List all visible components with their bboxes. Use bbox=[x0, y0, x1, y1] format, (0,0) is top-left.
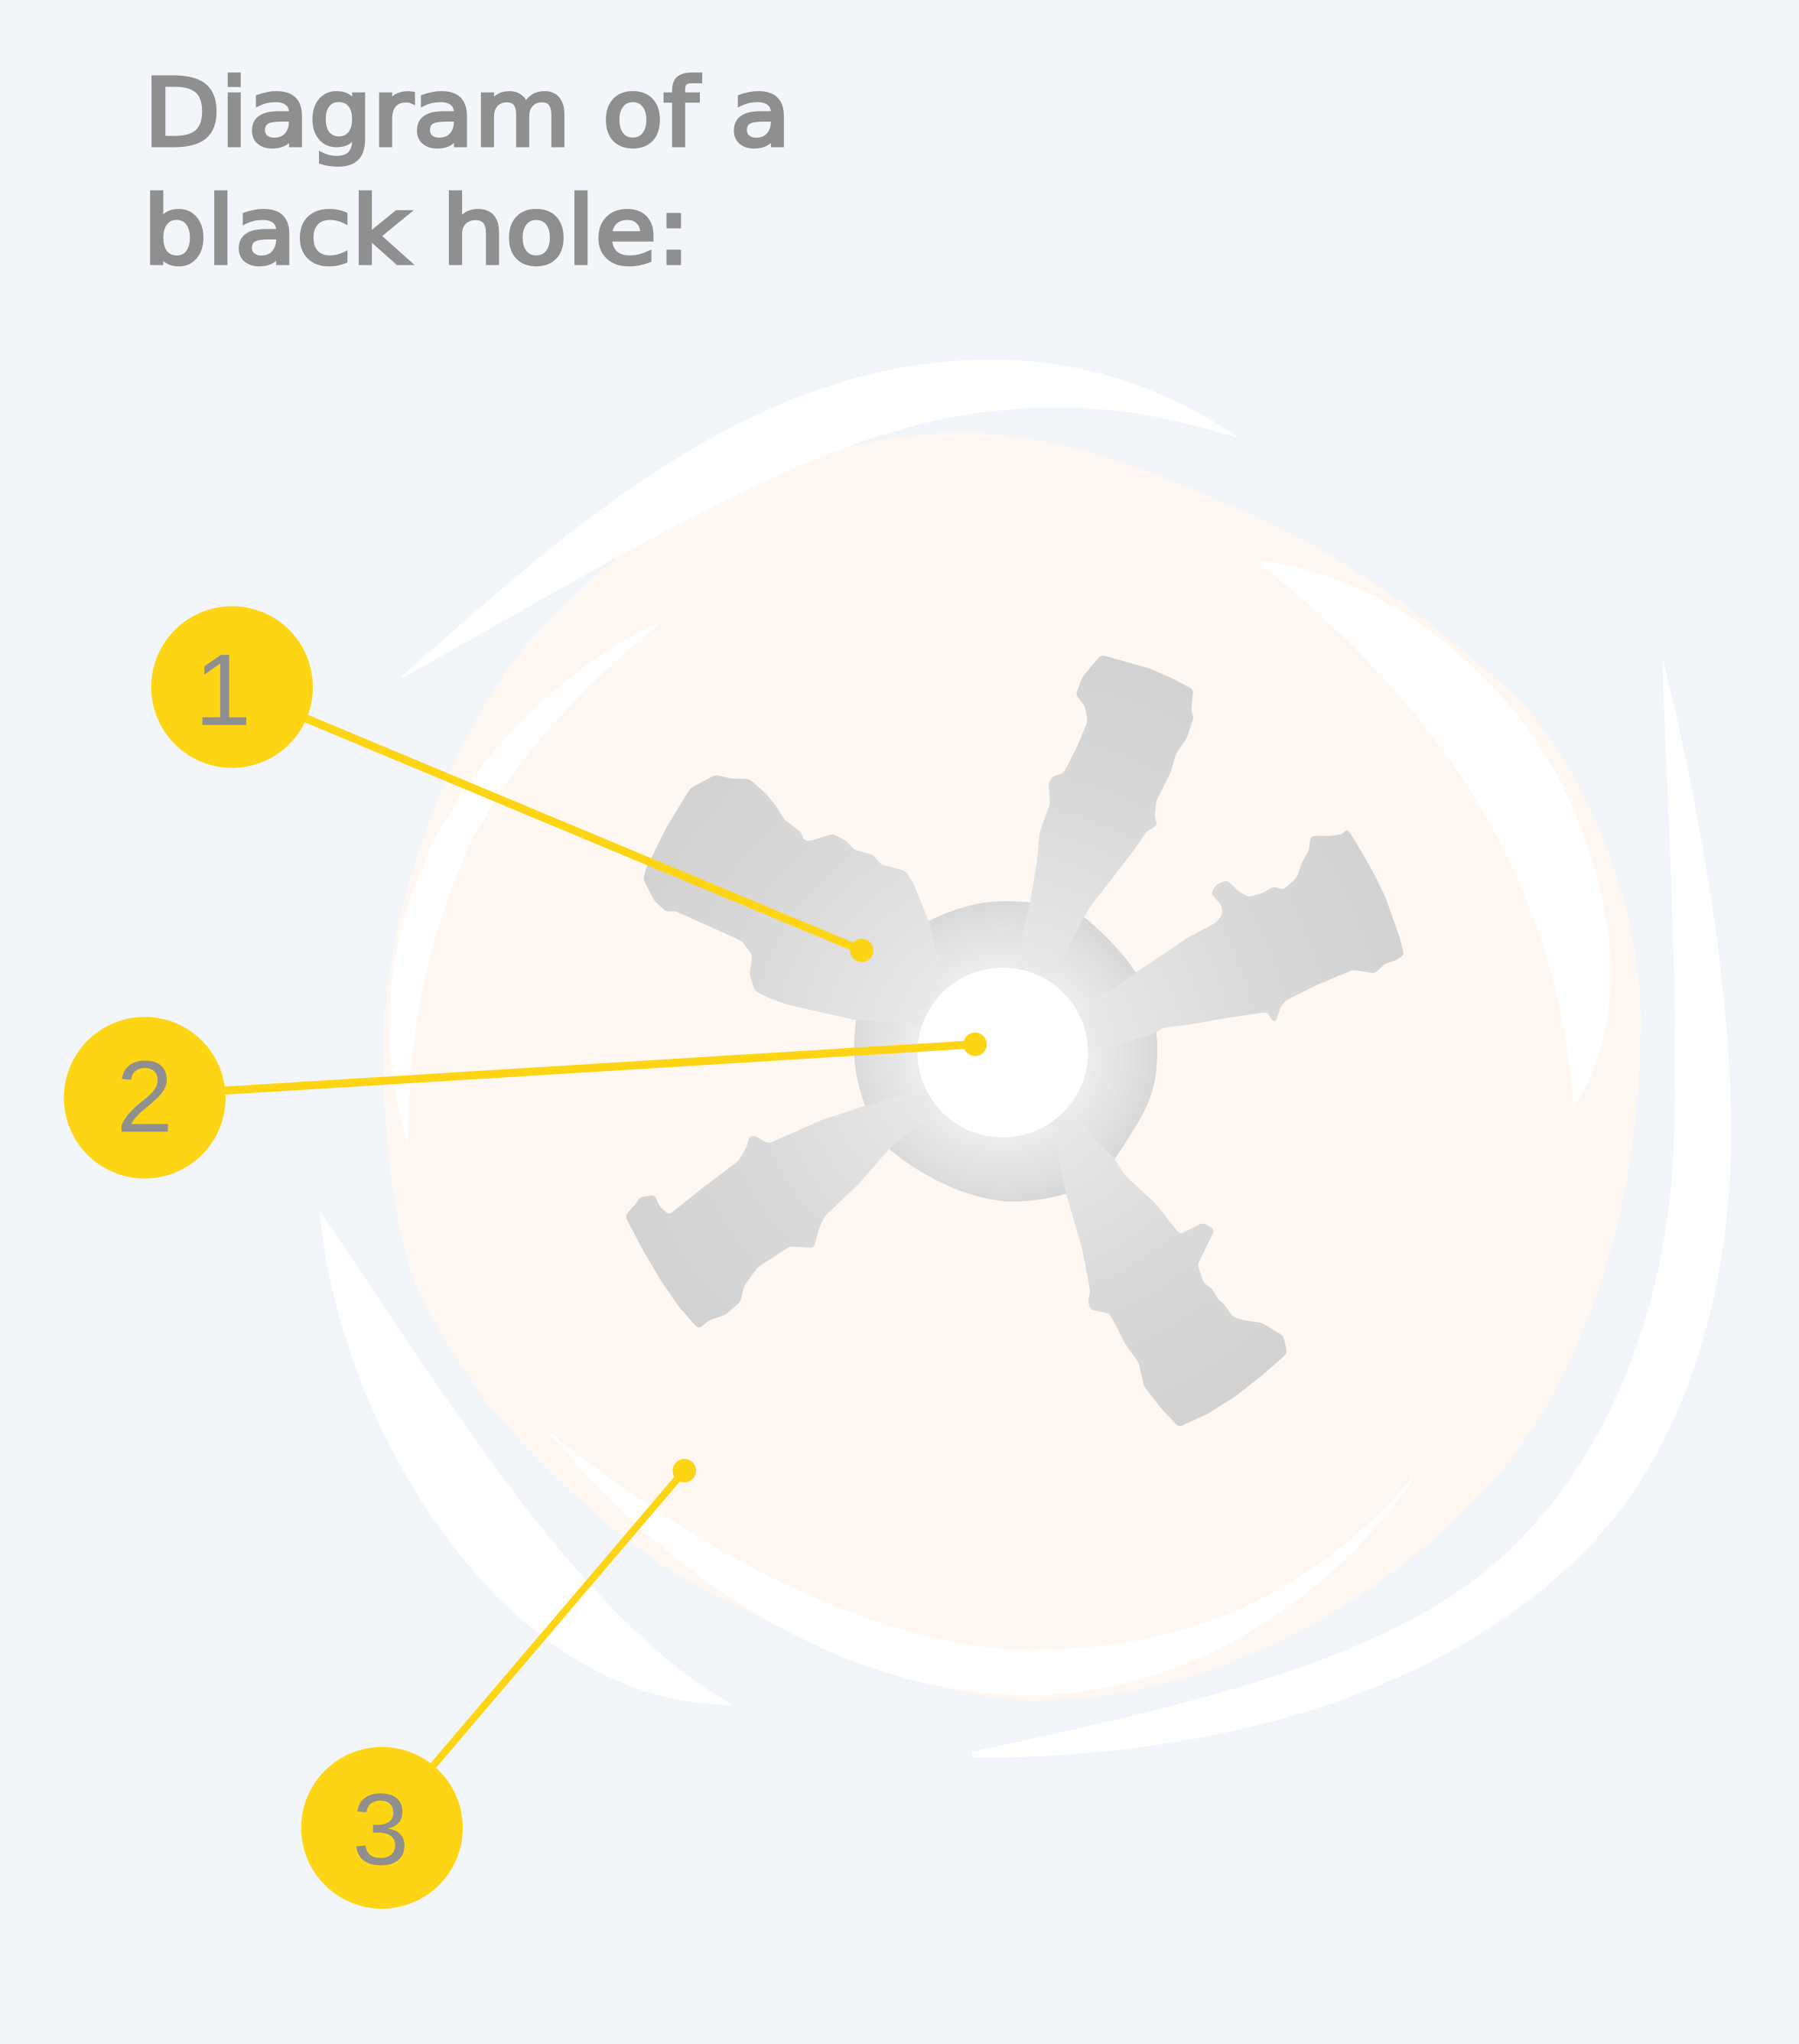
white swirl: upper right bbox=[1255, 560, 1611, 1107]
white swirl: bottom bbox=[548, 1431, 1418, 1695]
white swirl: lower left bbox=[320, 1211, 734, 1705]
black hole core bbox=[625, 655, 1404, 1427]
white swirl: far right bbox=[972, 656, 1731, 1758]
callouts bbox=[64, 606, 987, 1909]
spoke: top right bbox=[1015, 655, 1194, 1049]
callout 1 bbox=[151, 606, 873, 962]
spoke: lower right bbox=[1026, 1075, 1287, 1427]
spoke: lower left bbox=[625, 1053, 1003, 1329]
spoke: upper left bbox=[643, 775, 942, 1025]
title: Diagram of a bbox=[144, 59, 791, 168]
title bbox=[143, 59, 791, 285]
callout 1: 1 bbox=[194, 634, 251, 747]
white swirl: left bbox=[389, 623, 657, 1145]
event horizon white circle bbox=[917, 968, 1088, 1138]
outer ring bbox=[854, 901, 1157, 1202]
peach accretion disk bbox=[383, 433, 1641, 1701]
title: black hole: bbox=[143, 177, 691, 285]
callout 3: 3 bbox=[353, 1773, 409, 1886]
callout 2 bbox=[64, 1017, 987, 1179]
callout 3 bbox=[301, 1459, 696, 1909]
spoke: right bbox=[1026, 828, 1404, 1054]
white swirl: top bbox=[401, 360, 1239, 678]
callout 2: 2 bbox=[116, 1040, 173, 1154]
accretion disk illustration bbox=[320, 360, 1731, 1758]
